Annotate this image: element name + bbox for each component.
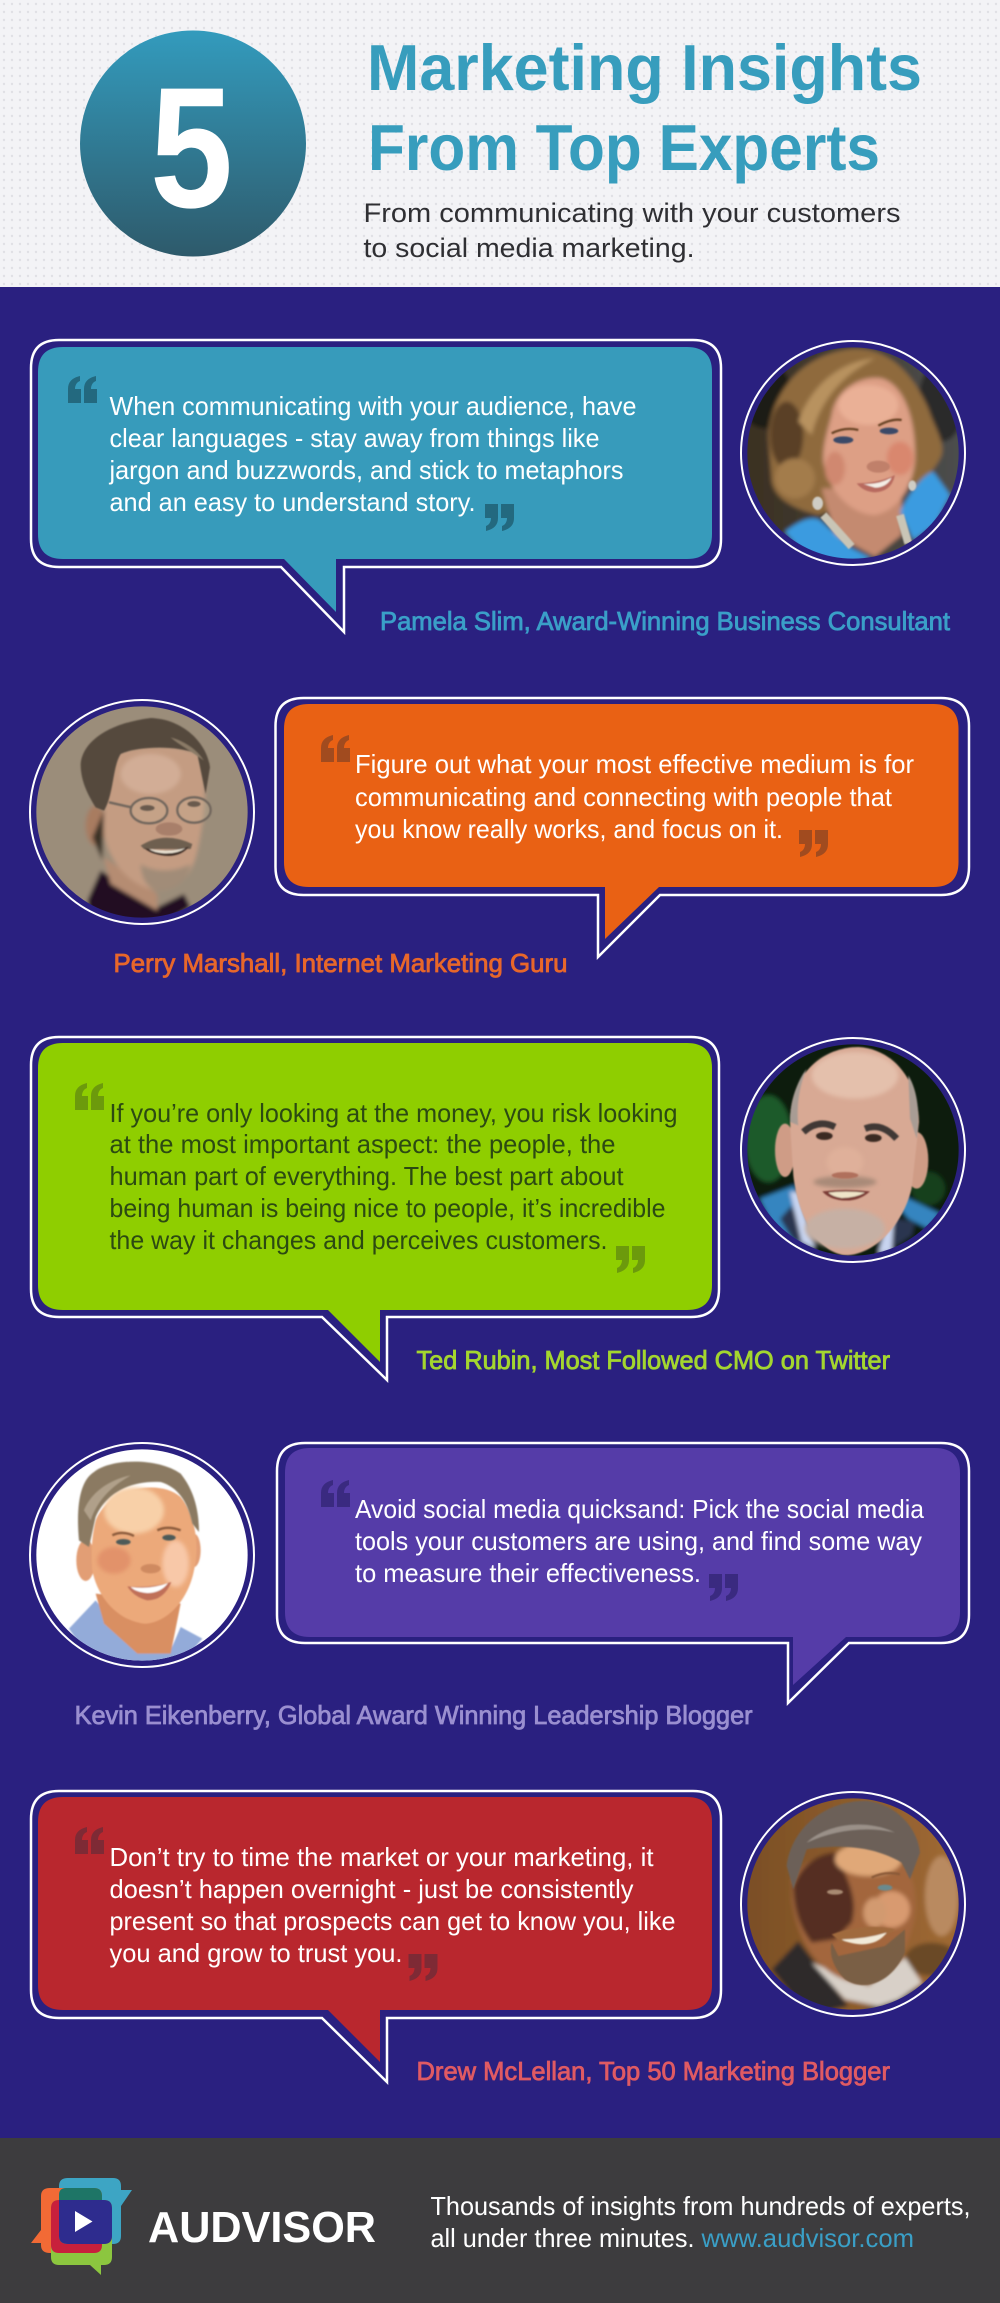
- quote text: Figure out what your most effective medium is for: [355, 749, 914, 779]
- portrait: Drew McLellan: [741, 1792, 965, 2016]
- title: [367, 31, 922, 184]
- speech bubble: [31, 1791, 721, 2082]
- quote text: doesn’t happen overnight - just be consistently: [110, 1874, 634, 1904]
- quote text: you know really works, and focus on it.: [355, 814, 783, 844]
- portrait: Ted Rubin: [741, 1038, 965, 1262]
- quote text: [110, 1098, 678, 1255]
- attribution: Drew McLellan, Top 50 Marketing Blogger: [416, 2056, 890, 2086]
- quote text: [109, 391, 636, 517]
- attribution: Perry Marshall, Internet Marketing Guru: [114, 948, 568, 978]
- quote text: jargon and buzzwords, and stick to metaphors: [109, 455, 623, 485]
- portrait: Pamela Slim: [738, 341, 965, 565]
- title: From Top Experts: [368, 111, 880, 184]
- icon: closing quote: [408, 1954, 438, 1981]
- icon: opening quote: [68, 376, 97, 403]
- panel: Ted Rubin quote: [31, 1037, 965, 1380]
- quote text: Don’t try to time the market or your marketing, it: [110, 1842, 654, 1872]
- subtitle: to social media marketing.: [364, 233, 694, 263]
- quote text: When communicating with your audience, have: [110, 391, 636, 421]
- quote text: present so that prospects can get to know you, like: [110, 1906, 676, 1936]
- quote text: Avoid social media quicksand: Pick the social media: [355, 1494, 925, 1524]
- panel: Kevin Eikenberry quote: [30, 1443, 969, 1730]
- attribution: Pamela Slim, Award-Winning Business Consultant: [380, 606, 951, 636]
- subtitle: From communicating with your customers: [364, 198, 900, 228]
- portrait: Perry Marshall: [30, 700, 254, 924]
- quote text: [110, 1842, 676, 1968]
- footer text: Thousands of insights from hundreds of experts,: [430, 2191, 970, 2221]
- quote text: If you’re only looking at the money, you risk looking: [110, 1098, 678, 1128]
- icon: opening quote: [321, 1480, 350, 1507]
- portrait: Kevin Eikenberry: [30, 1443, 254, 1667]
- speech bubble: [31, 1037, 719, 1380]
- quote text: and an easy to understand story.: [110, 487, 476, 517]
- attribution: Ted Rubin, Most Followed CMO on Twitter: [416, 1345, 890, 1375]
- badge: number 5: 5: [150, 52, 233, 244]
- footer text: all under three minutes.: [430, 2223, 694, 2253]
- quote text: [355, 749, 914, 844]
- logo wordmark: AUDVISOR: [148, 2203, 376, 2252]
- quote text: clear languages - stay away from things like: [110, 423, 600, 453]
- icon: opening quote: [75, 1827, 104, 1854]
- footer panel: [0, 2138, 1000, 2303]
- title: Marketing Insights: [367, 31, 922, 104]
- quote text: communicating and connecting with people that: [355, 782, 893, 812]
- quote text: at the most important aspect: the people, the: [110, 1129, 616, 1159]
- panel: Pamela Slim quote: [31, 340, 965, 636]
- header panel: [0, 0, 1000, 287]
- icon: opening quote: [321, 735, 350, 762]
- panel: Perry Marshall quote: [30, 698, 969, 978]
- speech bubble: [31, 340, 721, 632]
- quote text: being human is being nice to people, it’s incredible: [110, 1193, 666, 1223]
- icon: closing quote: [799, 830, 828, 857]
- quote text: to measure their effectiveness.: [355, 1558, 701, 1588]
- badge: number 5: [80, 30, 306, 256]
- subtitle: [364, 198, 900, 263]
- icon: opening quote: [75, 1083, 104, 1110]
- footer text: [430, 2191, 970, 2253]
- attribution: Kevin Eikenberry, Global Award Winning Leadership Blogger: [75, 1700, 753, 1730]
- footer text: www.audvisor.com: [701, 2223, 914, 2253]
- quote text: the way it changes and perceives customers.: [110, 1225, 608, 1255]
- speech bubble: [277, 1443, 969, 1703]
- icon: closing quote: [485, 504, 514, 531]
- speech bubble: [276, 698, 969, 957]
- icon: closing quote: [709, 1574, 738, 1601]
- icon: Audvisor logo: [31, 2178, 132, 2275]
- quote text: [355, 1494, 925, 1588]
- quote text: you and grow to trust you.: [110, 1938, 402, 1968]
- panel: Drew McLellan quote: [31, 1791, 965, 2086]
- icon: closing quote: [616, 1246, 645, 1273]
- quote text: tools your customers are using, and find some way: [355, 1526, 922, 1556]
- quote text: human part of everything. The best part about: [110, 1161, 624, 1191]
